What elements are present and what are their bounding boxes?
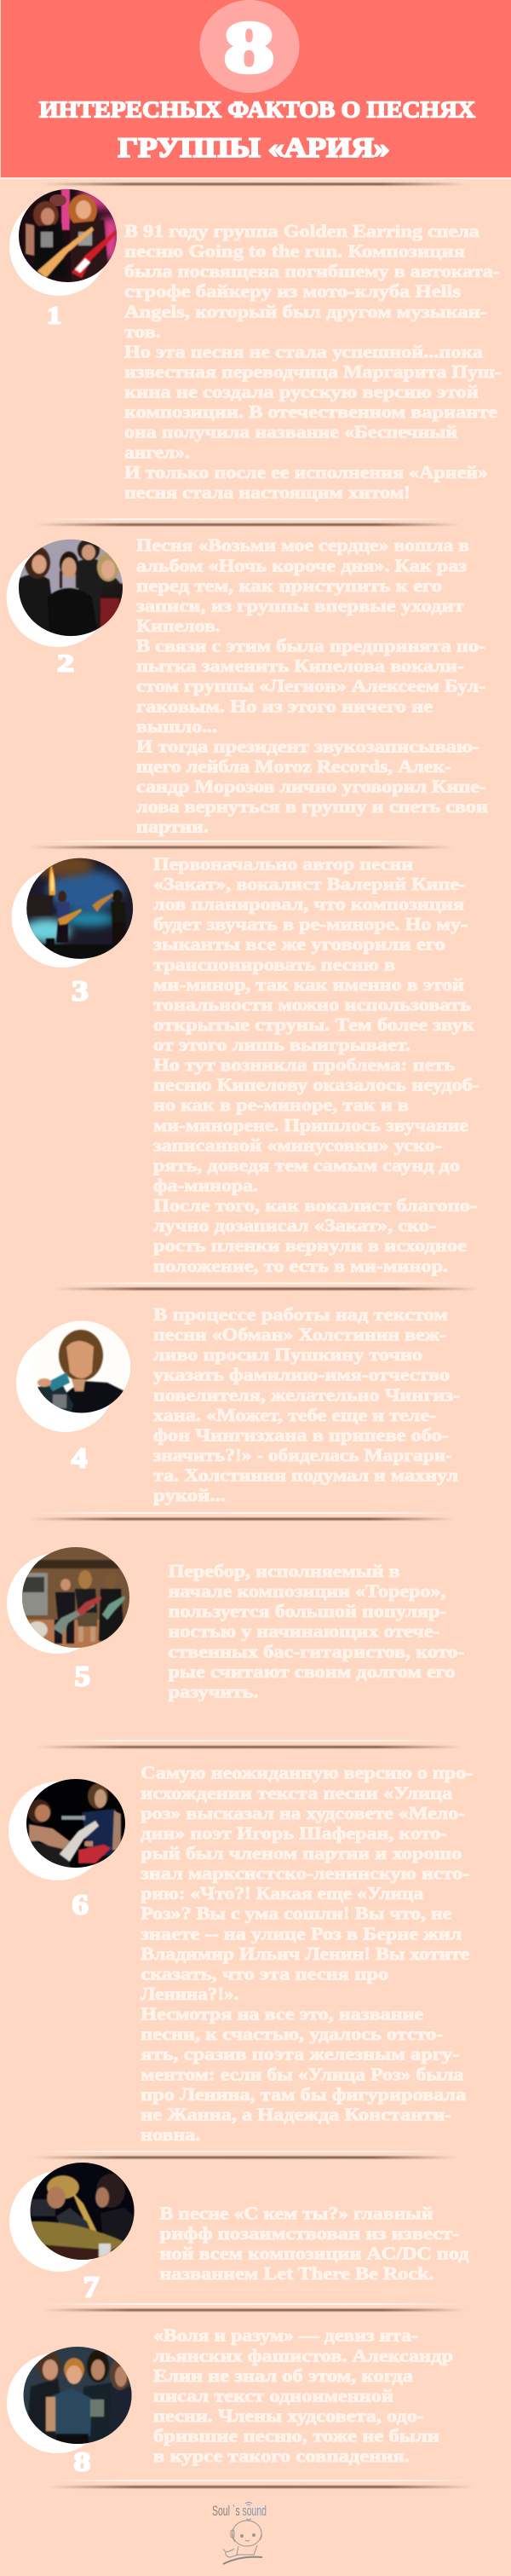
panel: fact 2 [7,535,488,837]
panel: fact 5 [7,1545,465,1701]
text block 3: После того, как вокалист благопо- [153,1195,477,1216]
text block 2: И тогда президент звукозаписываю- [136,736,479,756]
panel: fact 6 [9,1763,473,2145]
panel: fact 7 [9,2161,469,2303]
text block 3: будет звучать в ре-миноре. Но му- [153,914,468,934]
text block 4: ливо просил Пушкину точно [153,1344,422,1365]
text block 8: льянских фашистов. Александр [153,2345,453,2365]
text block 5: Перебор, исполняемый в [169,1561,400,1581]
text block 2: Кипелов. [136,615,221,636]
text block 5: разучить. [169,1681,259,1701]
text block 3: ми-минорене. Пришлось звучание [153,1115,468,1135]
text block 3: «Закат», вокалист Валерий Кипе- [153,874,466,894]
text block 2: лова вернуться в группу и спеть свои [136,796,488,817]
text block 6: сказать, что эта песня про [141,1963,388,1984]
text block 1: тов. [124,321,161,342]
text block 4: повелителя, желательно Чингиз- [153,1384,460,1405]
text block 6: Роз»? Вы с ума сошли! Вы что, не [141,1903,451,1924]
text block 2: пытка заменить Кипелова вокали- [136,656,464,676]
text block 8: писал текст одноименной [153,2385,393,2406]
text block 2: сандр Морозов лично уговорил Кипе- [136,776,486,796]
text block 1: песня стала настоящим хитом! [124,482,411,502]
text block 6: Самую неожиданную версию о про- [141,1763,473,1783]
text block 2: альбом «Ночь короче дня». Как раз [136,555,467,575]
panel: fact 4 [16,1304,460,1505]
white crescent 4 [16,1333,115,1432]
text block 3: зыканты все же уговорили его [153,934,445,955]
text block 3: тональности можно использовать [153,994,471,1014]
text block 4: рукой... [153,1485,226,1505]
text block 3: от этого лишь выигрывает. [153,1035,411,1055]
photo 7: two musicians behind cymbal [29,2161,136,2263]
white crescent 1 [9,197,108,296]
text block 2: стом группы «Легион» Алексеем Бул- [136,676,485,696]
text block 6: Несмотря на все это, название [141,2003,423,2024]
text block 2: записи, из группы впервые уходит [136,595,464,615]
header banner [1,0,511,177]
text block 3: рять, доведя тем самым саунд до [153,1155,460,1175]
photo 1: two guitarists [17,188,119,283]
text block 6: ять, сразив поэта железным аргу- [141,2044,459,2065]
text block 4: песни «Обман» Холстинин веж- [153,1325,446,1345]
header circle [199,0,300,93]
text block 3: но как в ре-миноре, так и в [153,1095,409,1115]
text block 6: песни, к счастью, удалось отсто- [141,2024,443,2044]
text block 6: не Жанна, а Надежда Константи- [141,2104,451,2124]
text block 3: лучно дозаписал «Закат», ско- [153,1216,436,1236]
white crescent 6 [9,1782,107,1880]
text block 6 [141,1763,473,2145]
text block 1: строфе байкеру из мото-клуба Hells [124,281,461,302]
photo 2: band portrait [17,537,124,638]
big number 8: 8 [224,6,274,88]
text block 6: исхождении текста песни «Улица [141,1782,453,1803]
text block 3: фа-минора. [153,1175,258,1195]
text block 2: щего лейбла Moroz Records, Алек- [136,756,451,777]
text block 4: значить?!» - обиделась Маргари- [153,1445,452,1465]
title line 2: ГРУППЫ «АРИЯ» [118,133,390,164]
text block 2: вышло... [136,716,217,736]
text block 1: песню Going to the run. Композиция [124,241,465,262]
text block 6: знал марксистско-ленинскую исто- [141,1863,469,1884]
text block 5: рые считают своим долгом его [169,1661,455,1682]
number 8: 8 [73,2446,90,2477]
photo 5: band on club stage [20,1545,131,1650]
white crescent 8 [7,2353,107,2453]
number 6: 6 [72,1889,89,1921]
text block 6: ментом: если бы «Улица Роз» была [141,2064,464,2084]
text block 5: ностью у начинающих отече- [169,1621,439,1642]
panel: fact 1 [9,188,502,502]
text block 1: композиции. В отечественном варианте [124,401,497,422]
text block 1: И только после ее исполнения «Арией» [124,462,488,482]
text block 1: Angels, который был другом музыкан- [124,301,487,321]
text block 6: рию: «Что?! Какая еще «Улица [141,1883,424,1903]
text block 4: указать фамилию-имя-отчество [153,1365,450,1385]
text block 4: В процессе работы над текстом [153,1304,448,1325]
text block 8: Елин не знал об этом, когда [153,2365,413,2386]
text block 7: ной всем композиции AC/DC под [160,2243,469,2263]
text block 8: брившие песню, тоже не были [153,2426,439,2446]
text block 2 [136,535,488,837]
text block 6: новна. [141,2124,200,2145]
icon: baby with headphones [223,2503,262,2564]
white crescent 3 [12,867,112,967]
text block 3: транспонировать песню в [153,954,395,974]
number 2: 2 [57,650,74,677]
logo: Soul's sound [212,2503,267,2564]
panel: fact 3 [12,853,479,1276]
text block 2: В связи с этим была предпринята по- [136,636,485,656]
text block 5: начале композиции «Тореро», [169,1581,446,1602]
logo wordmark: Soul `s sound [212,2503,267,2519]
text block 1: она получила название «Беспечный [124,422,457,442]
photo 3: stage with flame [26,858,133,959]
text block 7: рифф позаимствован из извест- [160,2223,460,2244]
text block 7: В песне «С кем ты?» главный [160,2203,433,2223]
text block 6: Владимир Ильич Ленин! Вы хотите [141,1944,469,1964]
text block 6: Ленина?!». [141,1984,238,2004]
text block 3: открытые струны. Тем более звук [153,1014,475,1035]
text block 6: роз» высказал на худсовете «Мело- [141,1803,465,1823]
text block 1: известная переводчица Маргарита Пуш- [124,361,502,382]
text block 2: Песня «Возьми мое сердце» вошла в [136,535,469,556]
text block 3: ми-минор, так как именно в этой [153,974,464,995]
text block 1: В 91 году группа Golden Earring спела [124,221,479,241]
text block 4 [153,1304,460,1505]
text block 8: песни. Члены худсовета, одо- [153,2406,424,2426]
text block 1: была посвящена погибшему в автоката- [124,261,500,281]
text block 3: песню Кипелову оказалось неудоб- [153,1075,479,1095]
text block 3: записанной «минусовки» уско- [153,1135,442,1155]
photo 6: two guitarists on black [26,1779,125,1868]
white crescent 2 [7,548,109,647]
text block 8 [153,2325,453,2466]
text block 3: Первоначально автор песни [153,853,413,874]
text block 7: названием Let There Be Rock. [160,2263,434,2284]
text block 8: «Воля и разум» — девиз ита- [153,2325,418,2346]
text block 2: гаковым. Но из этого ничего не [136,696,433,716]
text block 6: знаете -- на улице Роз в Берне жил [141,1923,462,1944]
text block 3: положение, то есть в ми-минор. [153,1256,448,1276]
white crescent 7 [9,2171,110,2272]
text block 1: ангел». [124,442,190,462]
text block 6: рый был членом партии и хорошо [141,1843,462,1863]
text block 2: перед тем, как приступить к его [136,575,442,596]
number 5: 5 [75,1661,90,1692]
text block 3: рость пленки вернули в исходное [153,1235,467,1256]
number 3: 3 [72,975,89,1008]
text block 3 [153,853,479,1276]
text block 1: кина не создала русскую версию этой [124,382,479,402]
text block 3: лов планировал, что композиция [153,893,464,914]
text block 3: Но тут возникла проблема: петь [153,1054,455,1075]
photo 8: band group portrait [22,2345,133,2446]
text block 4: фон Чингизхана в припеве обо- [153,1424,449,1445]
text block 5: ственных бас-гитаристов, кото- [169,1641,465,1661]
white crescent 5 [7,1553,107,1654]
number 1: 1 [47,303,61,329]
text block 6: дии» поэт Игорь Шаферан, кото- [141,1822,447,1843]
photo 4: portrait of guitarist [36,1321,131,1413]
number 4: 4 [72,1442,87,1475]
text block 5 [169,1561,465,1701]
text block 1: Но эта песня не стала успешной...пока [124,341,483,361]
text block 4: та. Холстинин подумал и махнул [153,1465,458,1486]
text block 2: партии. [136,817,209,837]
text block 8: в курсе такого совпадения. [153,2446,410,2466]
number 7: 7 [83,2271,99,2303]
text block 6: про Ленина, там бы фигурировала [141,2084,467,2105]
text block 1 [124,221,502,502]
text block 5: пользуется большой популяр- [169,1601,446,1621]
panel: fact 8 [7,2325,453,2477]
title line 1: ИНТЕРЕСНЫХ ФАКТОВ О ПЕСНЯХ [39,97,476,123]
text block 7 [160,2203,469,2284]
text block 4: хана. «Может, тебе еще и теле- [153,1405,436,1425]
